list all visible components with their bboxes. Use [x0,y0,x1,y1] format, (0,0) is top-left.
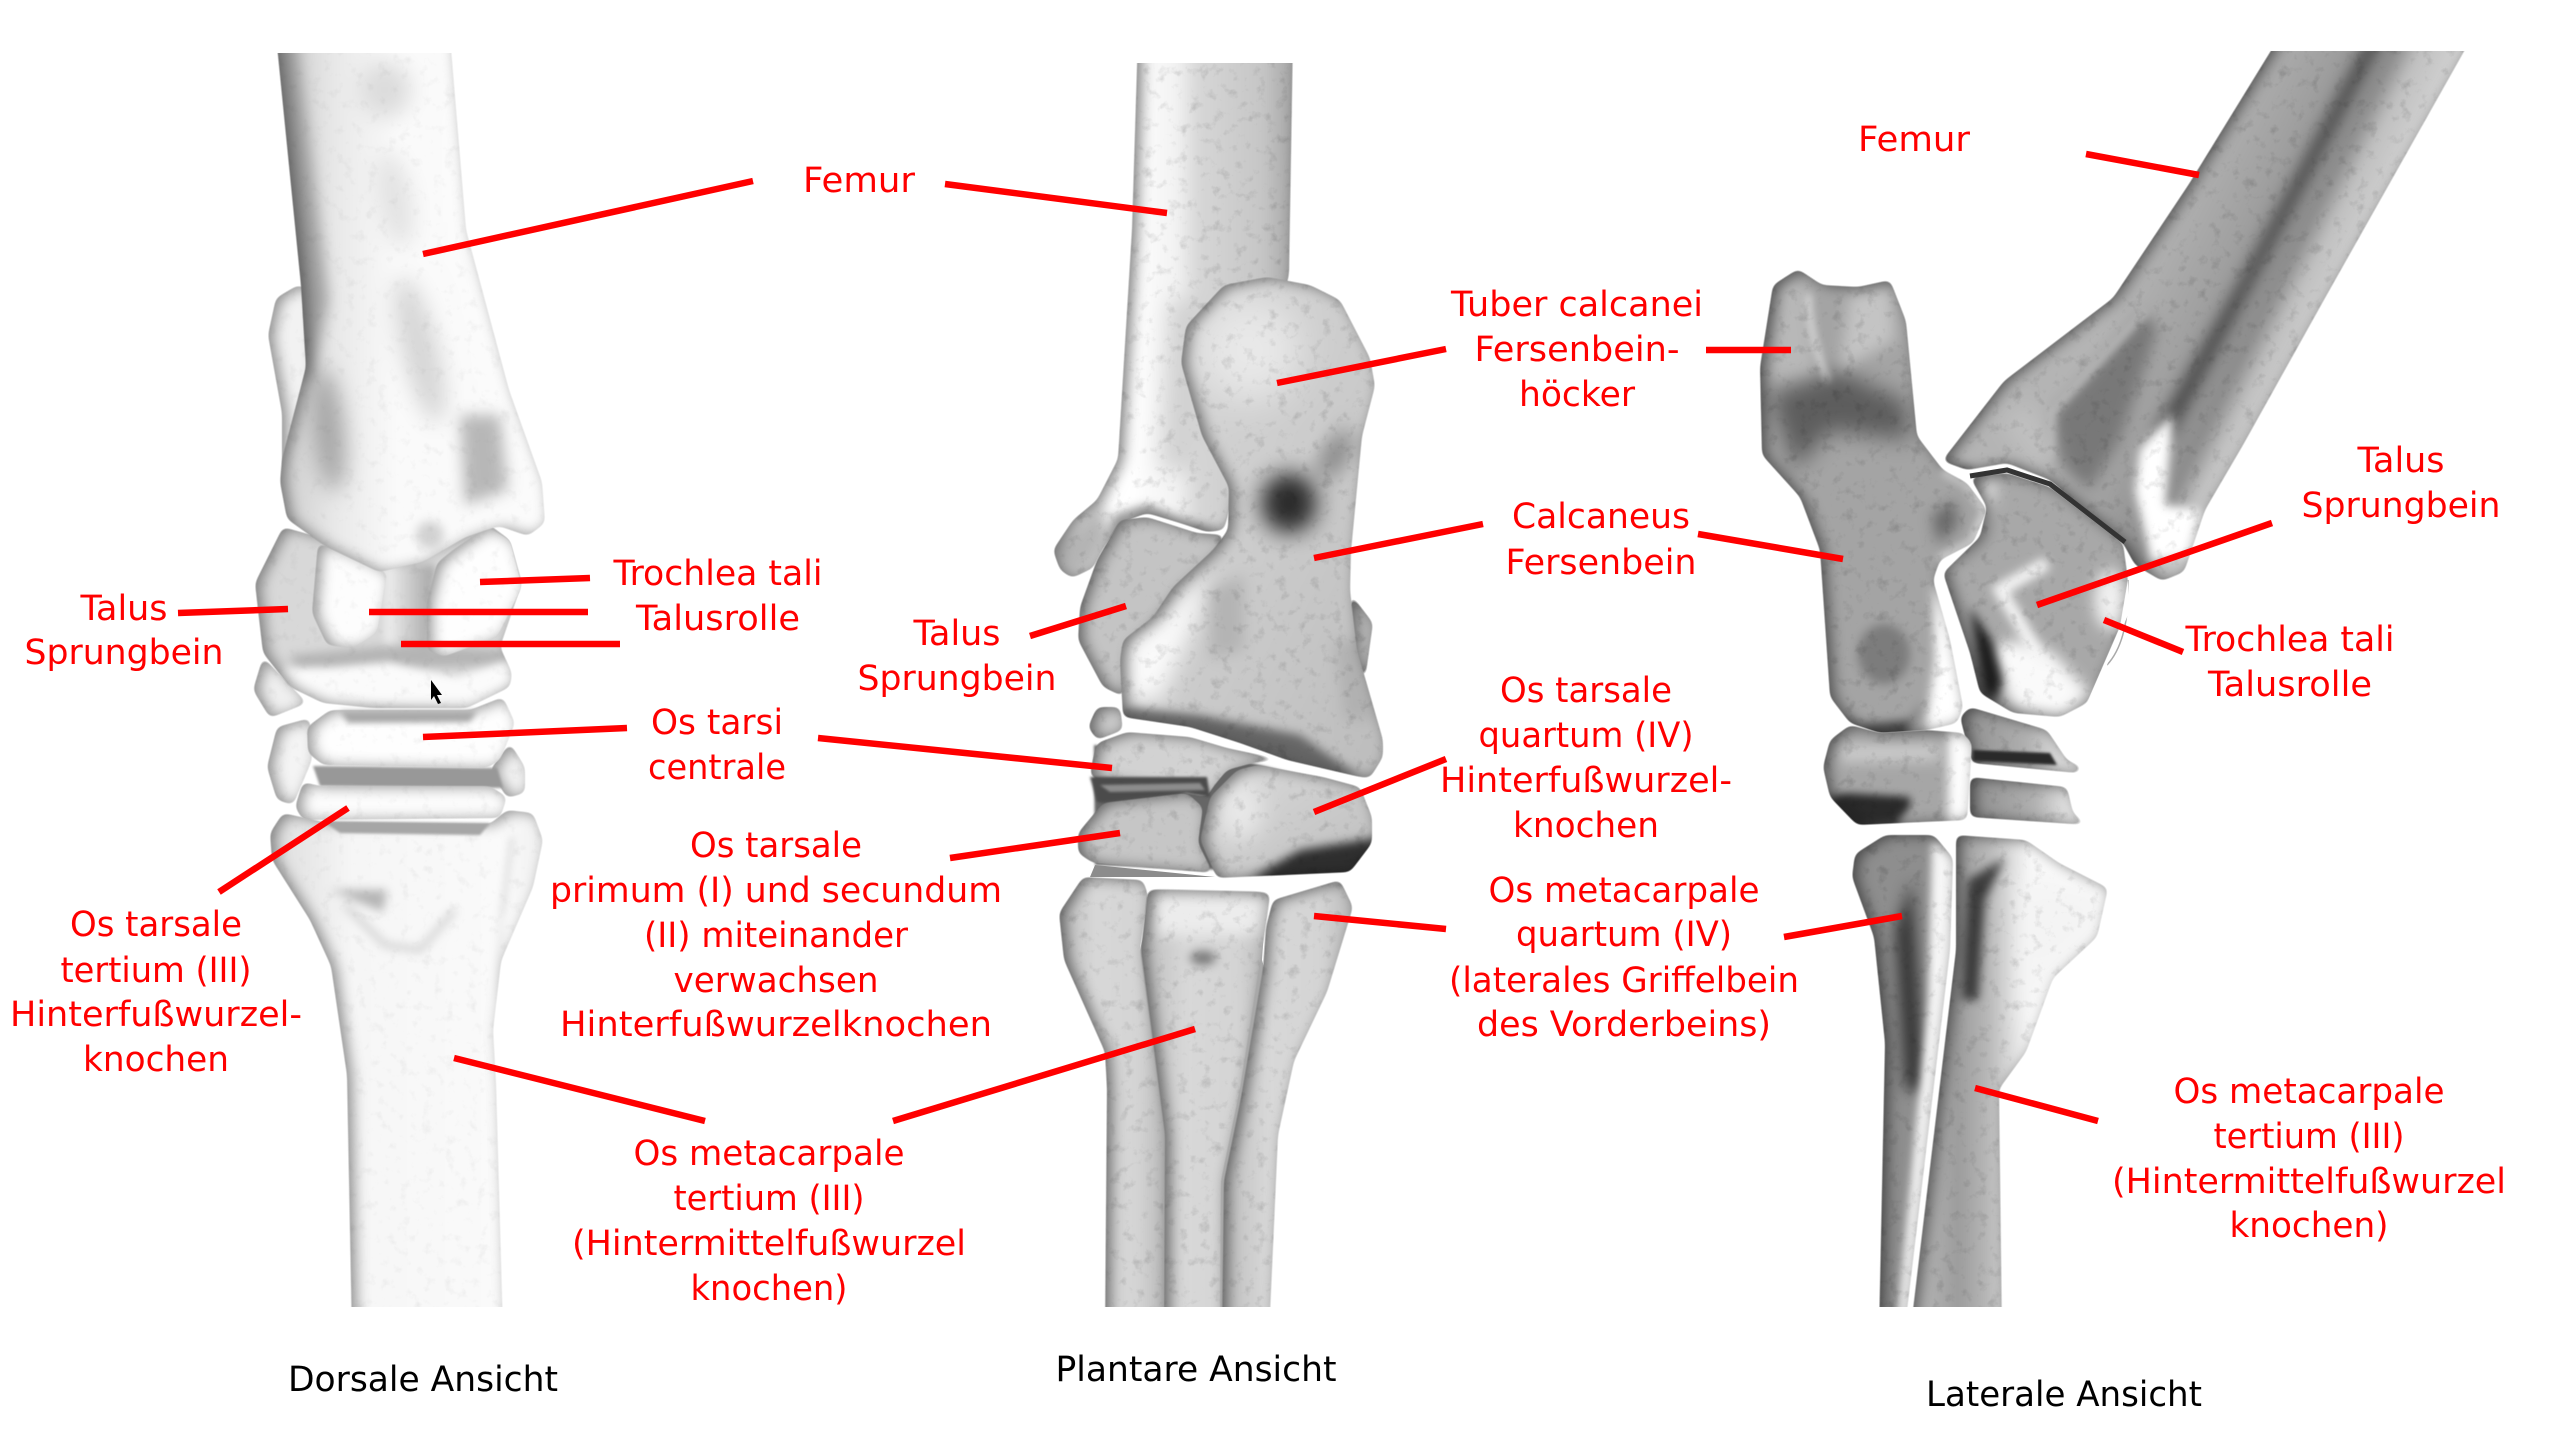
label: os metacarpale tertium plantar: knochen) [690,1269,848,1309]
label: calcaneus: Fersenbein [1506,543,1696,583]
bone: lateral skeleton [1760,23,2480,1335]
leader: os metacarpale dorsal [454,1058,705,1121]
label: os tarsale primum und secundum: (II) miteinander [644,916,909,956]
label: os tarsale primum und secundum: Hinterfußwurzelknochen [560,1005,992,1045]
label: os tarsale tertium [10,905,302,1080]
panel: plantar view [550,35,1799,1390]
label: talus plantar [858,614,1056,699]
label: os tarsale tertium: Hinterfußwurzel- [10,995,302,1035]
leader: trochlea tali lateral [2104,620,2183,652]
label: os tarsale primum und secundum: primum (I) und secundum [550,871,1002,911]
leader: calcaneus plantar [1314,524,1483,558]
bone: plantar skeleton [1053,35,1383,1335]
label: os tarsi centrale: centrale [648,748,786,788]
label: talus plantar: Talus [913,614,1000,654]
label: trochlea tali lateral [2185,620,2394,705]
label: os tarsale tertium: knochen [83,1040,229,1080]
leader: os metacarpale quartum lateral [1784,916,1902,937]
label: talus plantar: Sprungbein [858,659,1056,699]
label: os tarsale tertium: tertium (III) [60,951,252,991]
label: talus dorsal [24,589,224,673]
caption: dorsal view: Dorsale Ansicht [288,1360,558,1400]
label: os metacarpale tertium plantar: Os metacarpale [634,1134,904,1174]
label: os metacarpale quartum: Os metacarpale [1488,871,1760,911]
label: os tarsale primum und secundum: Os tarsale [690,826,862,866]
label: trochlea tali lateral: Talusrolle [2207,665,2372,705]
leader: tuber calcanei plantar [1277,349,1446,383]
leader: calcaneus lateral [1698,534,1843,559]
label: os tarsale primum und secundum: verwachsen [674,961,878,1001]
bone: dorsal skeleton [253,25,545,1335]
label: trochlea tali dorsal: Trochlea tali [613,554,822,594]
label: tuber calcanei: höcker [1519,375,1636,415]
label: talus lateral: Talus [2357,441,2444,481]
leader: os tarsale tertium [219,808,348,892]
leader: talus lateral [2037,523,2272,605]
caption: lateral view: Laterale Ansicht [1926,1375,2202,1415]
label: os tarsi centrale: Os tarsi [651,703,783,743]
caption: plantar view: Plantare Ansicht [1056,1350,1336,1390]
leader: femur plantar [945,184,1167,213]
label: femur: Femur [803,161,916,201]
label: os metacarpale tertium lateral: knochen) [2230,1206,2388,1246]
leader: os metacarpale quartum plantar [1314,916,1446,929]
label: trochlea tali lateral: Trochlea tali [2185,620,2394,660]
label: tuber calcanei: Tuber calcanei [1450,285,1703,325]
leader: os tarsale quartum [1314,759,1446,812]
icon: mouse cursor [431,680,442,704]
label: os tarsale primum und secundum [550,826,1002,1045]
label: os metacarpale quartum [1449,871,1799,1045]
panel: dorsal view [10,25,822,1400]
label: talus dorsal: Talus [80,589,168,629]
label: os metacarpale tertium lateral: Os metacarpale [2174,1072,2444,1112]
leader: femur lateral [2086,154,2199,175]
label: talus lateral [2302,441,2500,526]
label: os metacarpale tertium lateral: (Hintermittelfußwurzel [2112,1162,2506,1202]
leaders: trochlea tali dorsal [369,578,620,644]
label: os tarsale quartum [1440,671,1732,846]
label: os metacarpale quartum: (laterales Griffelbein [1449,961,1799,1001]
label: os metacarpale tertium plantar: tertium (III) [674,1179,864,1219]
label: trochlea tali dorsal [613,554,822,639]
label: tuber calcanei: Fersenbein- [1474,330,1680,370]
label: os tarsale quartum: Hinterfußwurzel- [1440,761,1732,801]
label: talus lateral: Sprungbein [2302,486,2500,526]
leader: os tarsi centrale dorsal [423,728,627,737]
label: os tarsale quartum: Os tarsale [1500,671,1672,711]
label: os metacarpale tertium plantar [572,1134,966,1309]
label: os metacarpale tertium lateral [2112,1072,2506,1246]
leader: femur dorsal [423,181,753,254]
leader: os tarsi centrale plantar [818,738,1112,768]
leader: os tarsale primum [950,833,1120,858]
leader: talus plantar [1030,606,1126,636]
label: calcaneus [1506,497,1696,583]
label: os tarsale quartum: quartum (IV) [1478,716,1694,756]
label: os metacarpale tertium lateral: tertium (III) [2214,1117,2404,1157]
label: os metacarpale quartum: quartum (IV) [1516,915,1732,955]
label: talus dorsal: Sprungbein [24,633,224,673]
label: tuber calcanei [1450,285,1703,415]
label: femur lateral: Femur [1858,120,1971,160]
label: os tarsale quartum: knochen [1513,806,1659,846]
label: os tarsale tertium: Os tarsale [70,905,242,945]
leader: os metacarpale tertium lateral [1975,1088,2098,1121]
panel: lateral view [1698,23,2506,1415]
label: os metacarpale tertium plantar: (Hintermittelfußwurzel [572,1224,966,1264]
label: trochlea tali dorsal: Talusrolle [635,599,800,639]
label: os tarsi centrale [648,703,786,788]
label: calcaneus: Calcaneus [1512,497,1690,537]
leader: talus dorsal [178,609,288,613]
leader: tuber calcanei lateral [1706,347,1791,353]
leader: os metacarpale tertium plantar [893,1029,1195,1121]
label: os metacarpale quartum: des Vorderbeins) [1477,1005,1771,1045]
